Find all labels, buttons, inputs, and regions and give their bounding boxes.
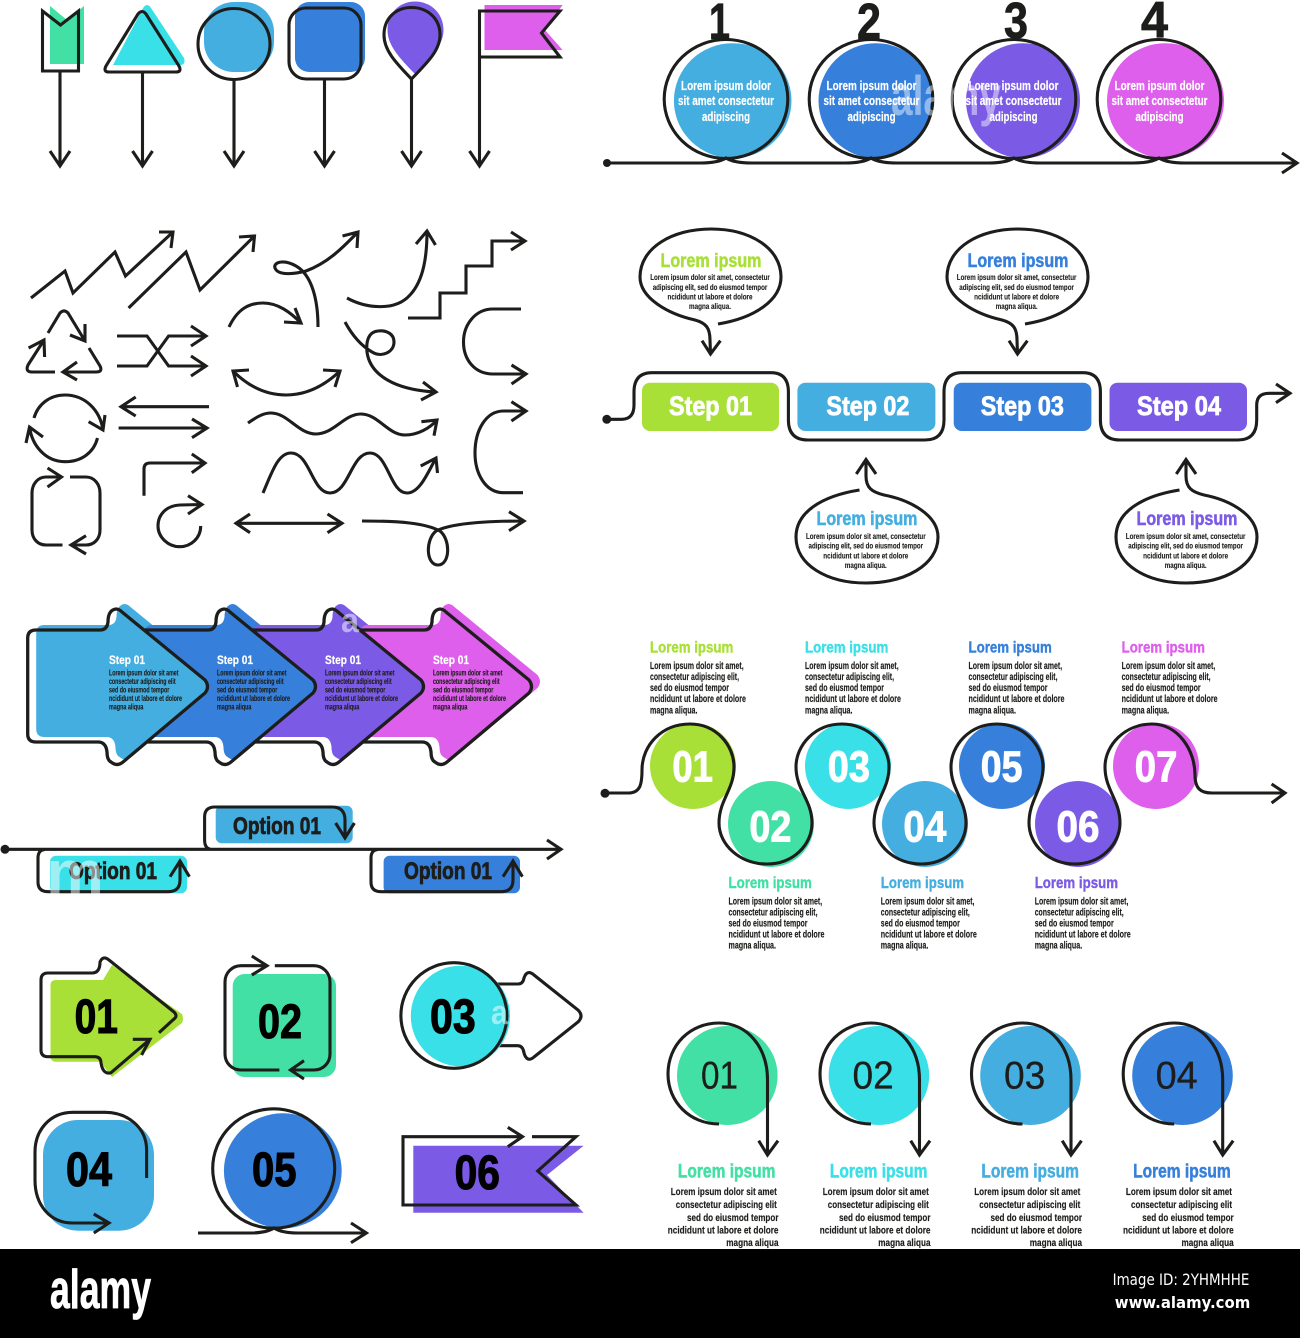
item 03	[971, 1023, 1082, 1249]
arrow: U turn right	[464, 309, 526, 384]
callout 2: magna aliqua.	[845, 560, 887, 570]
icon: blue square pin	[289, 2, 365, 166]
callout 1: ncididunt ut labore et dolore	[668, 292, 753, 302]
arrow: recycle triangle	[27, 311, 101, 380]
item 03: sed do eiusmod tempor	[990, 1213, 1082, 1224]
label 04: sed do eiusmod tempor	[881, 918, 960, 930]
callout 4: Lorem ipsum dolor sit amet, consectetur	[1126, 531, 1246, 541]
label 07: sed do eiusmod tempor	[1122, 683, 1201, 694]
text: arrow 3: magna aliqua	[325, 702, 360, 712]
badge 06: 06	[455, 1147, 500, 1200]
back fills of arrows	[36, 604, 540, 760]
label 01: Lorem ipsum	[650, 640, 733, 657]
label 01: Lorem ipsum dolor sit amet,	[650, 661, 744, 672]
callout 4: adipiscing elit, sed do eiusmod tempor	[1128, 541, 1243, 551]
label 07: Lorem ipsum	[1122, 640, 1205, 657]
label 04: magna aliqua.	[881, 940, 928, 952]
label 03: ncididunt ut labore et dolore	[805, 694, 901, 705]
arrow: curly down-right	[345, 322, 436, 400]
option box right	[384, 856, 520, 893]
text: arrow 2: Lorem ipsum dolor sit amet	[217, 668, 287, 678]
text in circle 1: adipiscing	[702, 109, 750, 124]
text: arrow 3: Step 01	[325, 655, 362, 667]
panel: overlapping step arrows	[28, 602, 540, 764]
badge 03	[401, 963, 581, 1068]
text: arrow 1: Lorem ipsum dolor sit amet	[109, 668, 179, 678]
label 01: consectetur adipiscing elit,	[650, 672, 739, 683]
circle numbers: 05	[981, 743, 1022, 792]
label 01	[650, 640, 746, 716]
labels: Option 01	[233, 813, 321, 840]
label 01: magna aliqua.	[650, 706, 698, 716]
arrow: crossed	[117, 326, 206, 376]
arrow: straight with loop	[362, 512, 524, 565]
callout 1: magna aliqua.	[689, 301, 731, 311]
label 06	[1035, 875, 1131, 952]
text: arrow 2: consectetur adipiscing elit	[217, 676, 284, 686]
text in circle 2: sit amet consectetur	[824, 93, 920, 108]
labels: Option 01	[404, 858, 492, 885]
badge 04: 04	[66, 1144, 112, 1197]
circle 02	[728, 781, 814, 867]
circle 03	[805, 723, 891, 809]
text in circle 3	[966, 78, 1062, 124]
arrow: L shape	[144, 454, 205, 496]
text: arrow 4: Lorem ipsum dolor sit amet	[433, 668, 503, 678]
item 03: Lorem ipsum	[981, 1162, 1079, 1183]
heading numbers	[709, 0, 1169, 50]
item 03: consectetur adipiscing elit	[979, 1200, 1081, 1211]
text: arrow 4: ncididunt ut labore et dolore	[433, 693, 506, 703]
icon: magenta flag pin	[470, 5, 563, 166]
label 07: Lorem ipsum dolor sit amet,	[1122, 661, 1215, 672]
text: arrow 2: Step 01	[217, 655, 254, 667]
arrow 3 purple	[244, 604, 432, 764]
text: arrow 1: magna aliqua	[109, 702, 144, 712]
item 04: sed do eiusmod tempor	[1142, 1213, 1234, 1224]
labels: Option 01	[69, 858, 157, 885]
label 07: magna aliqua.	[1122, 706, 1169, 716]
text in circle 3: adipiscing	[990, 109, 1038, 124]
item 01: sed do eiusmod tempor	[687, 1213, 778, 1224]
label 03: Lorem ipsum	[805, 640, 888, 657]
label 06: magna aliqua.	[1035, 940, 1082, 952]
arrow: wave 2	[263, 453, 438, 493]
circle 06	[1035, 781, 1121, 867]
label 05: magna aliqua.	[968, 706, 1016, 716]
callout 3	[947, 229, 1088, 354]
step 01 box	[642, 383, 779, 431]
label 03: magna aliqua.	[805, 706, 853, 716]
item 04: magna aliqua	[1182, 1238, 1234, 1249]
item 02: consectetur adipiscing elit	[828, 1200, 929, 1211]
circle numbers: 04	[903, 803, 947, 852]
logo: alamy	[50, 1258, 151, 1320]
arrow: stairs	[408, 232, 525, 318]
arrow: zigzag 2	[129, 236, 254, 308]
label 05	[968, 640, 1065, 716]
callout 1: adipiscing elit, sed do eiusmod tempor	[653, 282, 768, 292]
label 06: consectetur adipiscing elit,	[1035, 908, 1124, 918]
text in circle 1: Lorem ipsum dolor	[681, 78, 771, 93]
item 02: 02	[852, 1054, 894, 1097]
panel: numbered circles on timeline	[603, 0, 1297, 173]
label 05: sed do eiusmod tempor	[968, 683, 1048, 694]
callout 2: Lorem ipsum	[816, 509, 918, 530]
text: arrow 2: ncididunt ut labore et dolore	[217, 693, 290, 703]
item 04: ncididunt ut labore et dolore	[1123, 1226, 1234, 1236]
circle numbers: 02	[749, 803, 792, 852]
label 02: Lorem ipsum	[728, 875, 812, 892]
label 04: consectetur adipiscing elit,	[881, 908, 970, 918]
label 01: ncididunt ut labore et dolore	[650, 694, 746, 705]
text in circle 2: Lorem ipsum dolor	[826, 78, 916, 93]
label 04: ncididunt ut labore et dolore	[881, 930, 977, 940]
step 03 box	[954, 383, 1091, 431]
item 04: consectetur adipiscing elit	[1131, 1200, 1232, 1211]
label 02: sed do eiusmod tempor	[728, 918, 808, 930]
text in circle 1	[678, 78, 774, 124]
item 01: consectetur adipiscing elit	[676, 1200, 777, 1211]
option box top	[216, 806, 353, 843]
item 01: 01	[701, 1054, 738, 1097]
panel: serpentine numbered timeline	[600, 640, 1285, 952]
text: arrow 4: sed do eiusmod tempor	[433, 684, 494, 694]
arrow: rotate	[158, 496, 202, 547]
arrow: rounded square loop	[32, 468, 100, 554]
step 02 box	[797, 383, 935, 431]
badge 05: 05	[252, 1144, 297, 1197]
text: arrow 2: sed do eiusmod tempor	[217, 684, 278, 694]
callout 1	[640, 229, 781, 354]
label 04: Lorem ipsum	[881, 875, 964, 892]
text: arrow 3: sed do eiusmod tempor	[325, 684, 386, 694]
text: arrow 3: consectetur adipiscing elit	[325, 676, 392, 686]
circle 04	[882, 781, 968, 867]
icon: purple balloon pin	[384, 2, 444, 166]
callout 3: Lorem ipsum dolor sit amet, consectetur	[957, 272, 1077, 282]
arrow: arc right	[229, 303, 301, 327]
text in circle 1: sit amet consectetur	[678, 93, 774, 108]
badge 01	[41, 958, 183, 1077]
timeline line with loops	[603, 40, 1297, 173]
item 03: Lorem ipsum dolor sit amet	[974, 1187, 1081, 1198]
callout 3: Lorem ipsum	[968, 251, 1068, 272]
item 02: Lorem ipsum	[830, 1162, 928, 1183]
callout 3: magna aliqua.	[996, 301, 1038, 311]
item 01: Lorem ipsum	[678, 1162, 776, 1183]
arrow: left and right pair	[119, 397, 209, 438]
item 04: Lorem ipsum	[1133, 1162, 1231, 1183]
circle numbers	[672, 743, 1177, 852]
callout 3: ncididunt ut labore et dolore	[974, 292, 1059, 302]
text: arrow 2	[217, 655, 290, 712]
label 06: ncididunt ut labore et dolore	[1035, 930, 1131, 940]
label 05: consectetur adipiscing elit,	[968, 672, 1058, 683]
panel: footer bar	[0, 1249, 1300, 1338]
circle 07	[1113, 723, 1199, 809]
callout 1: Lorem ipsum	[660, 251, 762, 272]
serpentine track	[602, 373, 1290, 440]
arrow: double curved	[233, 370, 340, 395]
icon: green ribbon pin	[42, 6, 84, 166]
label 05: ncididunt ut labore et dolore	[968, 694, 1065, 705]
watermark: alamy	[891, 64, 1001, 127]
badge 05	[198, 1109, 366, 1243]
item 04: Lorem ipsum dolor sit amet	[1126, 1187, 1232, 1198]
step 04 box	[1110, 383, 1247, 431]
label 06: sed do eiusmod tempor	[1035, 918, 1114, 930]
circle 05	[959, 723, 1045, 809]
watermark fragment on option: m	[46, 839, 104, 908]
serpentine line	[600, 724, 1285, 864]
callout 3: adipiscing elit, sed do eiusmod tempor	[959, 282, 1074, 292]
text in circle 2	[824, 78, 920, 124]
callout 4: Lorem ipsum	[1136, 509, 1238, 530]
watermark fragment on arrows: a	[341, 602, 360, 640]
circle 4 fill	[1107, 43, 1224, 158]
item 04: 04	[1156, 1054, 1198, 1097]
label 06: Lorem ipsum	[1035, 875, 1118, 892]
arrow: curve up	[347, 231, 436, 307]
circle numbers: 01	[672, 743, 713, 792]
arrow 1 light blue	[28, 604, 216, 764]
badge 03: 03	[430, 991, 476, 1044]
text: arrow 1: sed do eiusmod tempor	[109, 684, 170, 694]
circle numbers: 07	[1135, 743, 1177, 792]
item 02: Lorem ipsum dolor sit amet	[823, 1187, 929, 1198]
text: arrow 4: consectetur adipiscing elit	[433, 676, 500, 686]
circle 2 fill	[818, 43, 934, 158]
panel: number badges	[35, 956, 584, 1243]
callout 2: adipiscing elit, sed do eiusmod tempor	[808, 541, 924, 551]
timeline line and connectors	[0, 807, 561, 892]
item 01: ncididunt ut labore et dolore	[668, 1226, 779, 1236]
callout 4: ncididunt ut labore et dolore	[1143, 550, 1228, 560]
text: arrow 1: Step 01	[109, 655, 146, 667]
arrow: circular	[26, 395, 105, 462]
arrow: loop up-right	[275, 232, 358, 327]
step 02 box: Step 02	[826, 391, 909, 421]
item 04	[1123, 1023, 1234, 1249]
label 02: Lorem ipsum dolor sit amet,	[728, 896, 822, 908]
text: arrow 4: magna aliqua	[433, 702, 468, 712]
circle numbers: 06	[1056, 803, 1100, 852]
text: arrow 3	[325, 655, 398, 712]
text in circle 2: adipiscing	[848, 109, 896, 124]
text: arrow 4: Step 01	[433, 655, 470, 667]
label 02: consectetur adipiscing elit,	[728, 908, 818, 918]
text: arrow 3: ncididunt ut labore et dolore	[325, 693, 398, 703]
label 07: consectetur adipiscing elit,	[1122, 672, 1211, 683]
panel: arrow collection	[26, 231, 526, 565]
option box left	[50, 856, 187, 893]
label 04: Lorem ipsum dolor sit amet,	[881, 896, 975, 908]
text in circle 3: sit amet consectetur	[966, 93, 1062, 108]
panel: option timeline	[0, 806, 561, 908]
badge 02: 02	[258, 996, 302, 1049]
item 01	[668, 1023, 779, 1249]
item 02: ncididunt ut labore et dolore	[820, 1226, 931, 1236]
site url: www.alamy.com	[1115, 1293, 1250, 1312]
label 03: consectetur adipiscing elit,	[805, 672, 894, 683]
label 03	[805, 640, 901, 716]
arrow: double straight	[236, 514, 342, 533]
label 02: magna aliqua.	[728, 940, 776, 952]
label 05: Lorem ipsum	[968, 640, 1052, 657]
item 02: magna aliqua	[878, 1238, 931, 1249]
circle 01	[650, 723, 736, 809]
text: arrow 1: consectetur adipiscing elit	[109, 676, 176, 686]
label 06: Lorem ipsum dolor sit amet,	[1035, 896, 1128, 908]
item 03: 03	[1004, 1054, 1045, 1097]
callout 2: Lorem ipsum dolor sit amet, consectetur	[806, 531, 926, 541]
callout 1: Lorem ipsum dolor sit amet, consectetur	[650, 272, 770, 282]
text in circle 3: Lorem ipsum dolor	[968, 78, 1058, 93]
item 01: magna aliqua	[726, 1238, 779, 1249]
item 03: magna aliqua	[1030, 1238, 1082, 1249]
callout 4: magna aliqua.	[1165, 560, 1207, 570]
arrow 2 blue	[136, 604, 324, 764]
callout 2: ncididunt ut labore et dolore	[823, 550, 909, 560]
panel: step process with callouts	[602, 229, 1290, 583]
text in circle 4: sit amet consectetur	[1112, 93, 1208, 108]
labels	[69, 813, 492, 885]
text in circle 4: adipiscing	[1136, 109, 1184, 124]
step 04 box: Step 04	[1137, 391, 1221, 421]
item 01: Lorem ipsum dolor sit amet	[671, 1187, 777, 1198]
panel: pin markers	[42, 2, 563, 166]
step 01 box: Step 01	[669, 391, 752, 421]
text: arrow 4	[433, 655, 506, 712]
badge 01: 01	[75, 991, 118, 1044]
label 07: ncididunt ut labore et dolore	[1122, 694, 1218, 705]
label 02	[728, 875, 825, 952]
label 01: sed do eiusmod tempor	[650, 683, 729, 694]
text: arrow 1: ncididunt ut labore et dolore	[109, 693, 182, 703]
panel: bottom circles with arrows	[668, 1023, 1234, 1249]
text in circle 4	[1112, 78, 1208, 124]
arrow: zigzag 1	[31, 232, 173, 298]
arrow 4 magenta	[352, 604, 540, 764]
badge 04	[35, 1112, 154, 1233]
icon: light blue circle pin	[198, 2, 274, 166]
arrow: wave 1	[248, 413, 437, 436]
item 02: sed do eiusmod tempor	[839, 1213, 930, 1224]
arrow: C shape	[475, 402, 526, 493]
callout 4	[1116, 460, 1257, 583]
watermark fragment on badge 03: a	[491, 994, 509, 1032]
label 02: ncididunt ut labore et dolore	[728, 930, 825, 940]
label 03: Lorem ipsum dolor sit amet,	[805, 661, 899, 672]
text: arrow 1	[109, 655, 182, 712]
item 02	[820, 1023, 931, 1249]
item 03: ncididunt ut labore et dolore	[971, 1226, 1082, 1236]
label 07	[1122, 640, 1218, 716]
badge 06	[403, 1127, 584, 1213]
label 03: sed do eiusmod tempor	[805, 683, 884, 694]
text: arrow 3: Lorem ipsum dolor sit amet	[325, 668, 395, 678]
icon: cyan triangle pin	[105, 5, 184, 166]
circle 3 fill	[966, 43, 1080, 158]
label 05: Lorem ipsum dolor sit amet,	[968, 661, 1062, 672]
circle 1 fill	[674, 43, 792, 158]
label 04	[881, 875, 977, 952]
circle numbers: 03	[828, 743, 870, 792]
badge 02	[225, 956, 336, 1079]
step 03 box: Step 03	[981, 391, 1064, 421]
text: arrow 2: magna aliqua	[217, 702, 252, 712]
image id: Image ID: 2YHMHHE	[1113, 1270, 1249, 1289]
text in circle 4: Lorem ipsum dolor	[1114, 78, 1204, 93]
callout 2	[796, 460, 938, 583]
